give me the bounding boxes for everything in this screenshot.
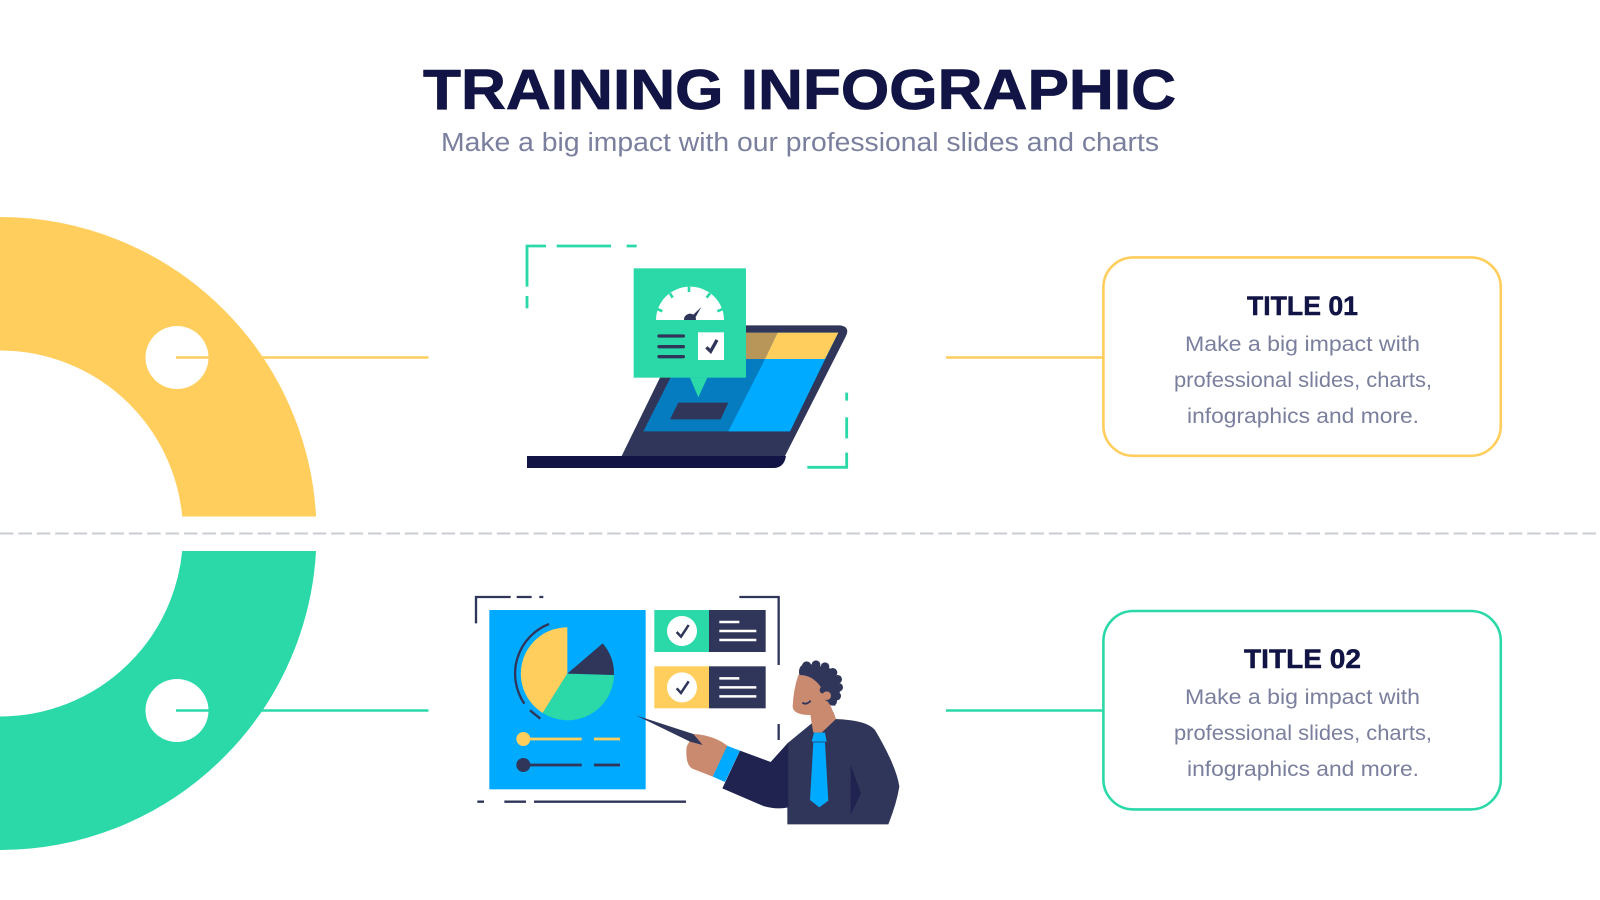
connector 1 left	[176, 356, 428, 359]
dashed frame	[527, 246, 847, 467]
connector 2 left	[176, 709, 428, 712]
card 1 text: professional slides, charts,	[1174, 369, 1432, 392]
laptop	[527, 325, 847, 468]
node 1	[146, 326, 208, 389]
illustration: presenter with chart	[476, 597, 899, 824]
card 1	[1103, 257, 1501, 456]
check card green	[654, 610, 766, 652]
yellow half ring	[0, 217, 316, 516]
illustration: laptop with gauge popup	[527, 246, 847, 468]
frame dashes	[476, 597, 779, 802]
chart board	[489, 610, 646, 789]
card 1 text: infographics and more.	[1187, 405, 1419, 428]
connector 2 right	[946, 709, 1104, 712]
presenter	[636, 660, 899, 824]
sliders	[516, 732, 620, 772]
pie chart	[515, 624, 614, 720]
card 2 text: professional slides, charts,	[1174, 722, 1432, 745]
card 2	[1103, 611, 1501, 809]
gauge popup	[634, 268, 746, 397]
connector 1 right	[946, 356, 1104, 359]
green half ring	[0, 551, 316, 850]
card 2 text	[1174, 686, 1432, 781]
card 2 title: TITLE 02	[1244, 644, 1361, 674]
node 2	[146, 679, 208, 742]
title: TRAINING INFOGRAPHIC	[423, 58, 1176, 122]
card 1 title: TITLE 01	[1247, 291, 1358, 321]
card 1 text	[1174, 333, 1432, 428]
divider	[0, 532, 1600, 534]
card 2 text: Make a big impact with	[1185, 686, 1420, 709]
card 2 text: infographics and more.	[1187, 758, 1419, 781]
check card yellow	[654, 666, 766, 708]
subtitle: Make a big impact with our professional slides and charts	[441, 129, 1159, 157]
card 1 text: Make a big impact with	[1185, 333, 1420, 356]
